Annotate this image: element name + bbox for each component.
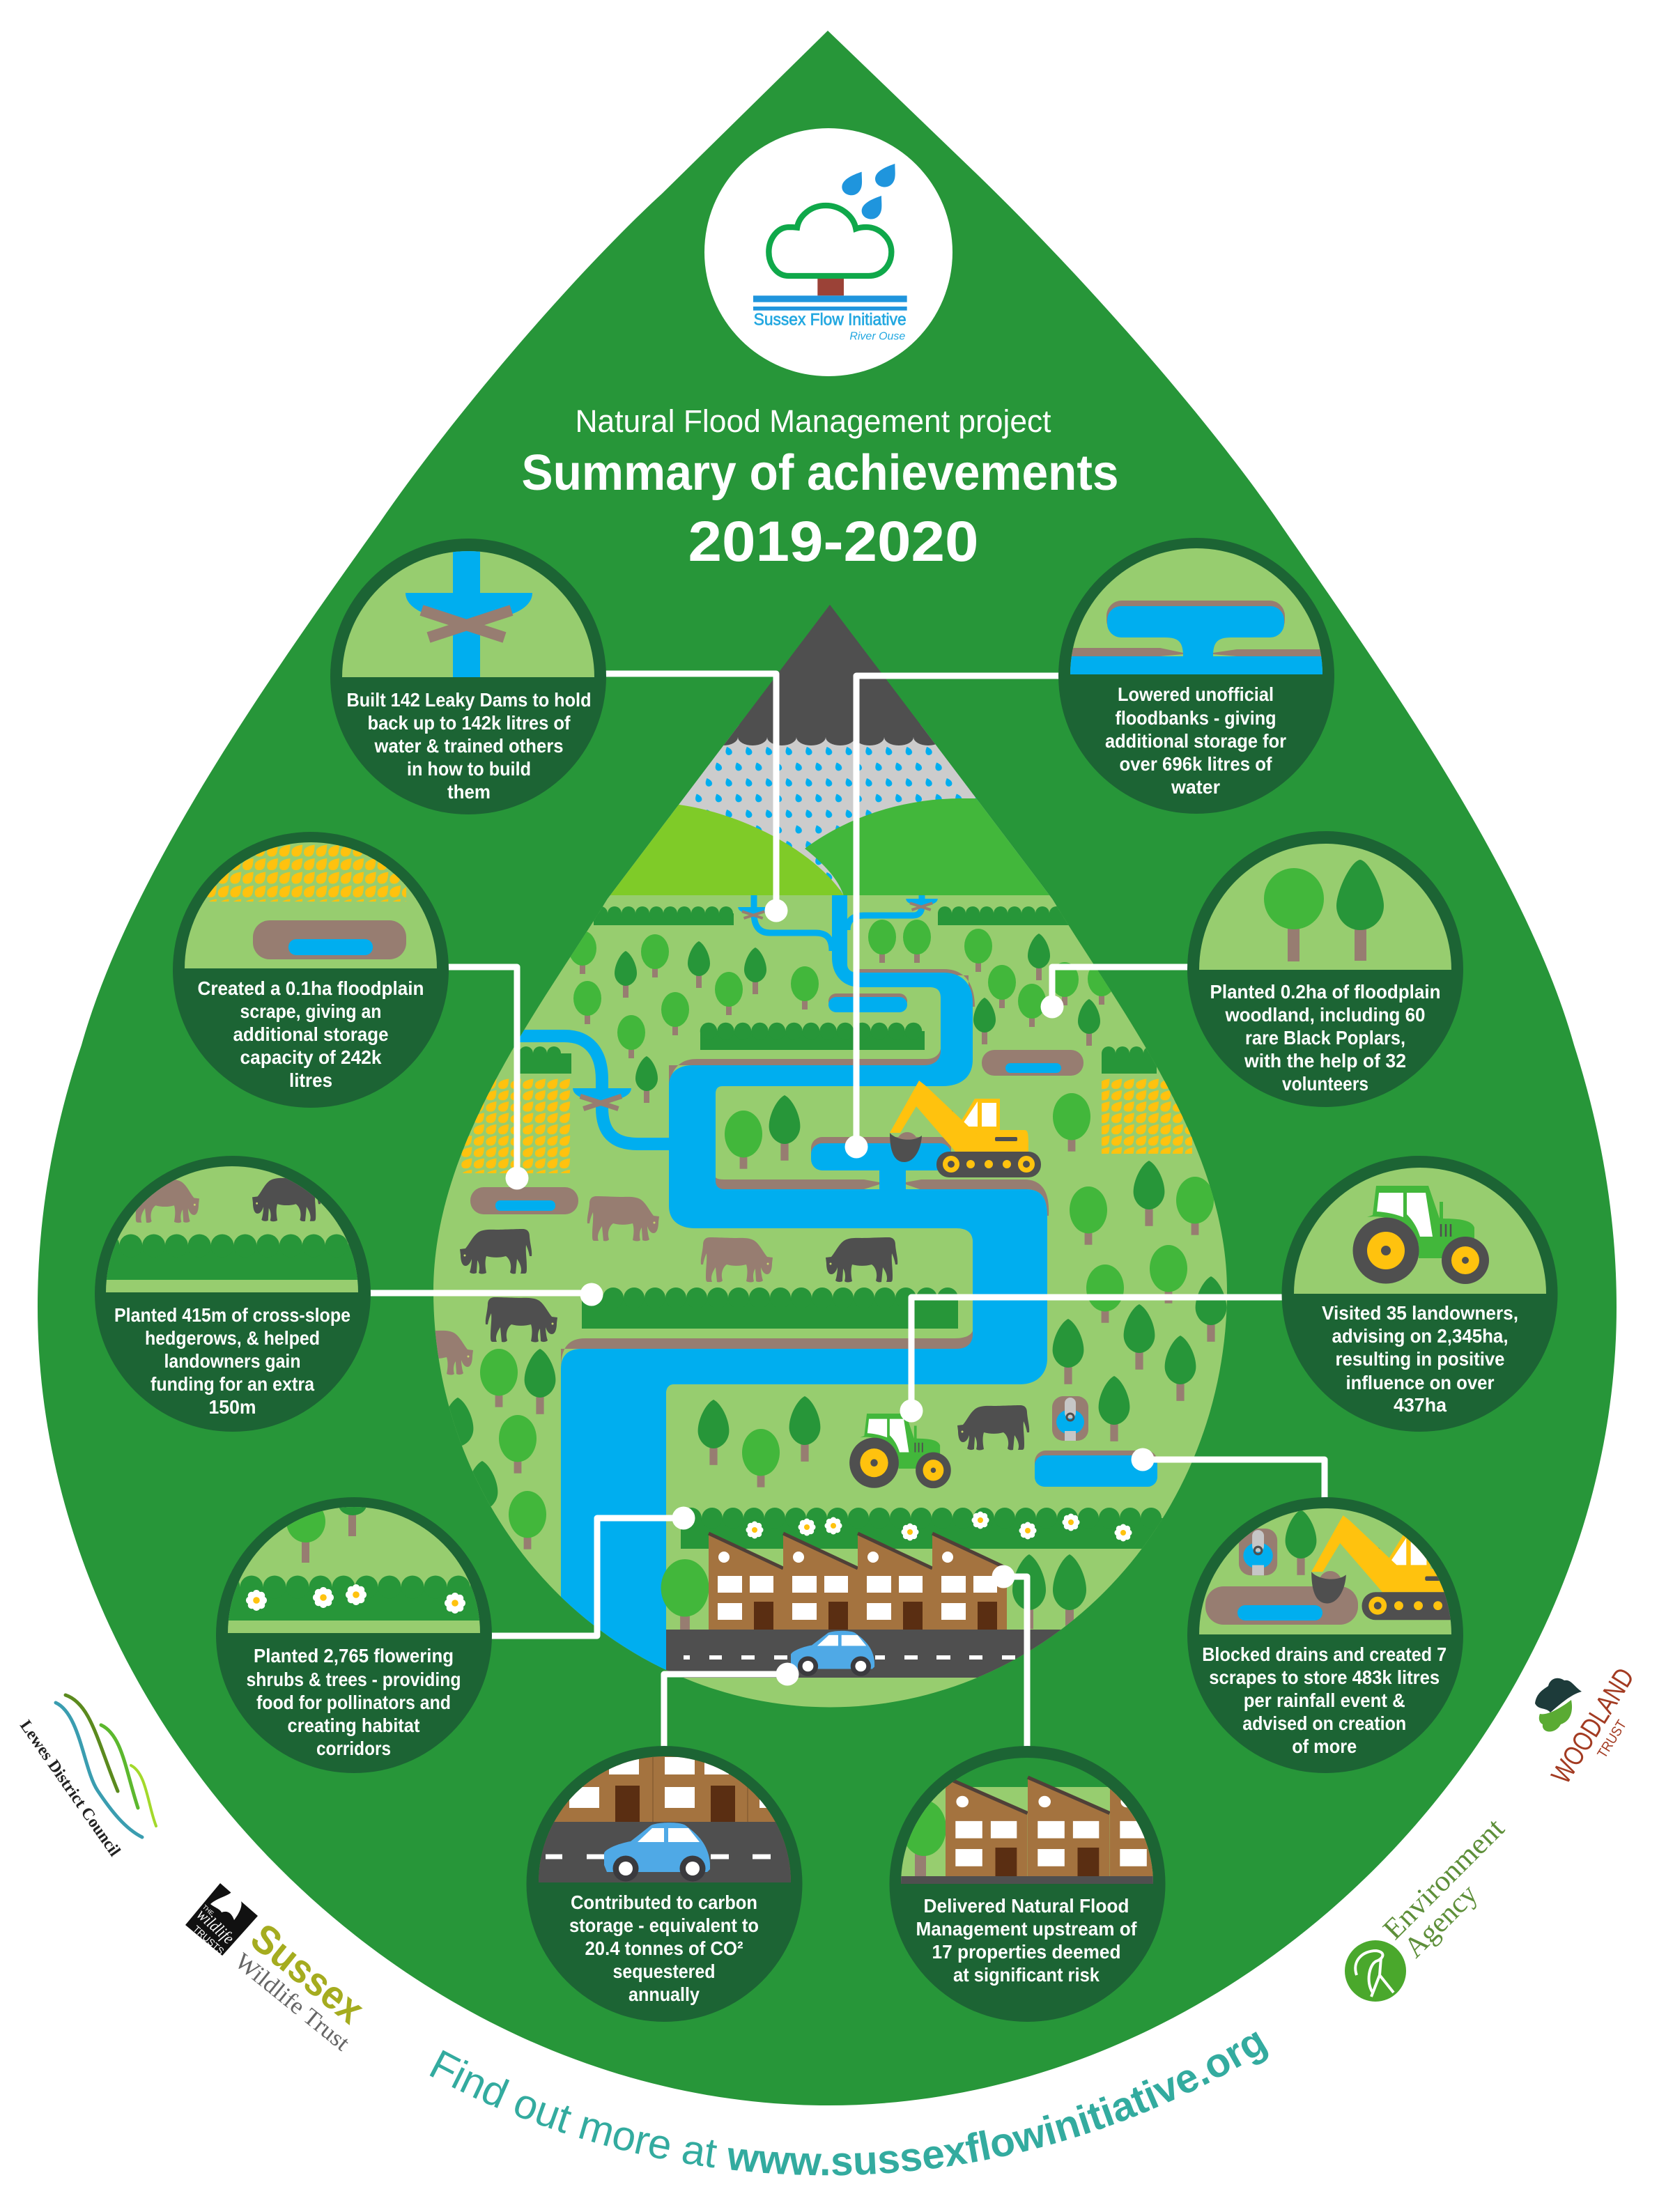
icon: houses, road and car <box>530 1742 801 1882</box>
text: hedgerows: Planted 415m of cross-slope <box>114 1304 350 1326</box>
text: hedgerows: funding for an extra <box>151 1373 315 1395</box>
text: landowner visits: 437ha <box>1394 1394 1447 1416</box>
text: hedgerows: landowners gain <box>164 1350 301 1372</box>
title block: Summary of achievements <box>521 445 1119 501</box>
panel: carbon storage <box>527 1742 803 2022</box>
text: floodbanks: water <box>1171 776 1220 798</box>
text: properties protected: Management upstream of <box>916 1918 1137 1940</box>
logo: Environment Agency: Agency <box>1398 1878 1484 1964</box>
text: blocked drains: per rainfall event & <box>1244 1689 1405 1711</box>
panel: floodbanks <box>1058 538 1334 814</box>
text: leaky dams: them <box>447 781 491 803</box>
text: floodbanks: Lowered unofficial <box>1118 683 1274 705</box>
text: flowering shrubs: food for pollinators and <box>256 1692 451 1713</box>
text: carbon storage: 20.4 tonnes of CO² <box>585 1938 743 1959</box>
meadow <box>418 895 1240 1717</box>
text: flowering shrubs: creating habitat <box>287 1715 419 1736</box>
leaky dams <box>573 899 938 1108</box>
text: floodplain scrape <box>198 977 424 1091</box>
text: carbon storage: storage - equivalent to <box>569 1915 759 1936</box>
logo: Environment Agency <box>1345 1812 1511 2002</box>
logo: Environment Agency: Environment <box>1378 1812 1511 1946</box>
text: floodplain scrape: Created a 0.1ha floodplain <box>198 977 424 999</box>
text: flowering shrubs: Planted 2,765 flowering <box>254 1645 454 1666</box>
icon: cows and hedge <box>105 1177 362 1280</box>
right hill <box>805 798 1066 899</box>
text: flowering shrubs: corridors <box>316 1738 391 1759</box>
icon: houses and tree <box>892 1777 1192 1885</box>
icon: scrape and crops <box>195 843 406 959</box>
text: blocked drains: of more <box>1292 1735 1357 1757</box>
panel: leaky dams <box>330 539 606 814</box>
text: blocked drains <box>1202 1643 1447 1757</box>
text: floodplain scrape: scrape, giving an <box>240 1000 382 1022</box>
trees <box>442 920 1226 1630</box>
connector end dots <box>506 899 1154 1686</box>
logo: Lewes District Council <box>16 1695 156 1860</box>
text: properties protected <box>916 1895 1137 1986</box>
car <box>791 1631 874 1676</box>
text: blocked drains: Blocked drains and created 7 <box>1202 1643 1447 1665</box>
scrapes <box>470 1050 1083 1214</box>
logo: Sussex Wildlife Trust: wildlife <box>193 1905 238 1948</box>
text: floodplain woodland: with the help of 32 <box>1244 1050 1406 1072</box>
title block: Natural Flood Management project <box>576 403 1051 439</box>
text: landowner visits <box>1322 1302 1518 1416</box>
text: leaky dams <box>347 689 591 803</box>
logo: Lewes District Council: Lewes District Council <box>16 1717 124 1860</box>
text: floodbanks: floodbanks - giving <box>1115 707 1277 729</box>
logo: Woodland Trust: WOODLAND <box>1545 1663 1640 1789</box>
text: floodplain scrape: litres <box>289 1069 332 1091</box>
connector lines <box>366 674 1325 1752</box>
text: floodplain woodland <box>1210 981 1441 1095</box>
logo: Sussex Wildlife Trust <box>185 1883 373 2056</box>
logo: Sussex Wildlife Trust: THE <box>201 1903 215 1917</box>
text: hedgerows: 150m <box>209 1396 256 1418</box>
text: flowering shrubs: shrubs & trees - providing <box>247 1669 461 1690</box>
panel: floodplain woodland <box>1187 831 1463 1107</box>
cows <box>401 1196 1029 1451</box>
houses <box>709 1533 1007 1630</box>
text: floodplain woodland: woodland, including 60 <box>1225 1004 1426 1026</box>
panel: flowering shrubs <box>216 1494 492 1773</box>
hedges <box>519 913 1167 1549</box>
website link: Find out more at www.sussexflowinitiative.org <box>429 2032 1268 2176</box>
icon: leaky dam <box>406 550 532 677</box>
river <box>561 895 1047 1707</box>
logo: Sussex Wildlife Trust: Wildlife Trust <box>230 1948 355 2056</box>
text: hedgerows: hedgerows, & helped <box>145 1327 320 1349</box>
text: floodplain scrape: additional storage <box>233 1023 389 1045</box>
tractor <box>849 1414 951 1488</box>
panel: landowner visits <box>1282 1156 1558 1432</box>
text: carbon storage: Contributed to carbon <box>571 1892 757 1913</box>
icon: tractor <box>1353 1186 1489 1284</box>
text: properties protected: 17 properties deemed <box>932 1941 1120 1963</box>
panel: properties protected <box>889 1746 1192 2022</box>
left hill <box>608 804 843 899</box>
logo: Sussex Flow Initiative <box>704 128 952 376</box>
text: landowner visits: Visited 35 landowners, <box>1322 1302 1518 1324</box>
logo: Sussex Wildlife Trust: Sussex <box>242 1915 373 2032</box>
text: leaky dams: water & trained others <box>374 735 563 757</box>
flowers in hedge <box>746 1512 1132 1541</box>
logo: Woodland Trust <box>1535 1663 1640 1789</box>
text: carbon storage: annually <box>628 1983 700 2005</box>
text: floodbanks: over 696k litres of <box>1119 753 1272 775</box>
dark mountain and cloud <box>723 605 935 745</box>
excavator <box>890 1081 1041 1177</box>
icon: two trees <box>1264 860 1384 961</box>
icon: lowered floodbank <box>1066 601 1331 674</box>
icon: trees, hedge and flowers <box>223 1494 484 1621</box>
text: leaky dams: in how to build <box>407 758 531 780</box>
crop fields <box>461 1078 1192 1173</box>
logo: Sussex Wildlife Trust: TRUSTS <box>191 1923 226 1956</box>
title block: 2019-2020 <box>688 510 978 573</box>
text: landowner visits: advising on 2,345ha, <box>1332 1325 1508 1347</box>
text: leaky dams: Built 142 Leaky Dams to hold <box>347 689 591 711</box>
text: floodplain woodland: rare Black Poplars, <box>1245 1027 1405 1049</box>
text: floodbanks <box>1105 683 1286 798</box>
logo: Woodland Trust: TRUST <box>1595 1717 1630 1761</box>
rain area <box>599 725 1073 906</box>
text: floodplain woodland: Planted 0.2ha of floodplain <box>1210 981 1441 1003</box>
text: blocked drains: advised on creation <box>1242 1712 1406 1734</box>
text: landowner visits: resulting in positive <box>1335 1348 1505 1370</box>
streams and ponds <box>519 895 1157 1487</box>
river banks <box>561 969 1157 1478</box>
text: landowner visits: influence on over <box>1346 1372 1495 1393</box>
logo: Sussex Flow Initiative: River Ouse <box>849 330 905 342</box>
text: hedgerows <box>114 1304 350 1418</box>
panel: floodplain scrape <box>173 832 449 1108</box>
title block <box>521 403 1119 573</box>
text: floodplain woodland: volunteers <box>1282 1073 1368 1095</box>
blocked drain <box>1052 1396 1088 1441</box>
road <box>666 1630 1084 1678</box>
text: carbon storage: sequestered <box>613 1960 715 1982</box>
text: flowering shrubs <box>247 1645 461 1759</box>
icon: drain, pond and excavator <box>1205 1510 1475 1625</box>
logo: Sussex Flow Initiative: Sussex Flow Initiative <box>754 311 907 330</box>
central landscape scene <box>401 599 1240 1717</box>
panel: blocked drains <box>1187 1497 1475 1773</box>
text: properties protected: at significant risk <box>953 1964 1100 1986</box>
text: blocked drains: scrapes to store 483k litres <box>1209 1666 1440 1688</box>
panel: hedgerows <box>95 1156 371 1432</box>
text: properties protected: Delivered Natural Flood <box>924 1895 1129 1917</box>
text: floodbanks: additional storage for <box>1105 730 1286 752</box>
text: leaky dams: back up to 142k litres of <box>368 712 571 734</box>
text: floodplain scrape: capacity of 242k <box>240 1046 382 1068</box>
text: carbon storage <box>569 1892 759 2005</box>
